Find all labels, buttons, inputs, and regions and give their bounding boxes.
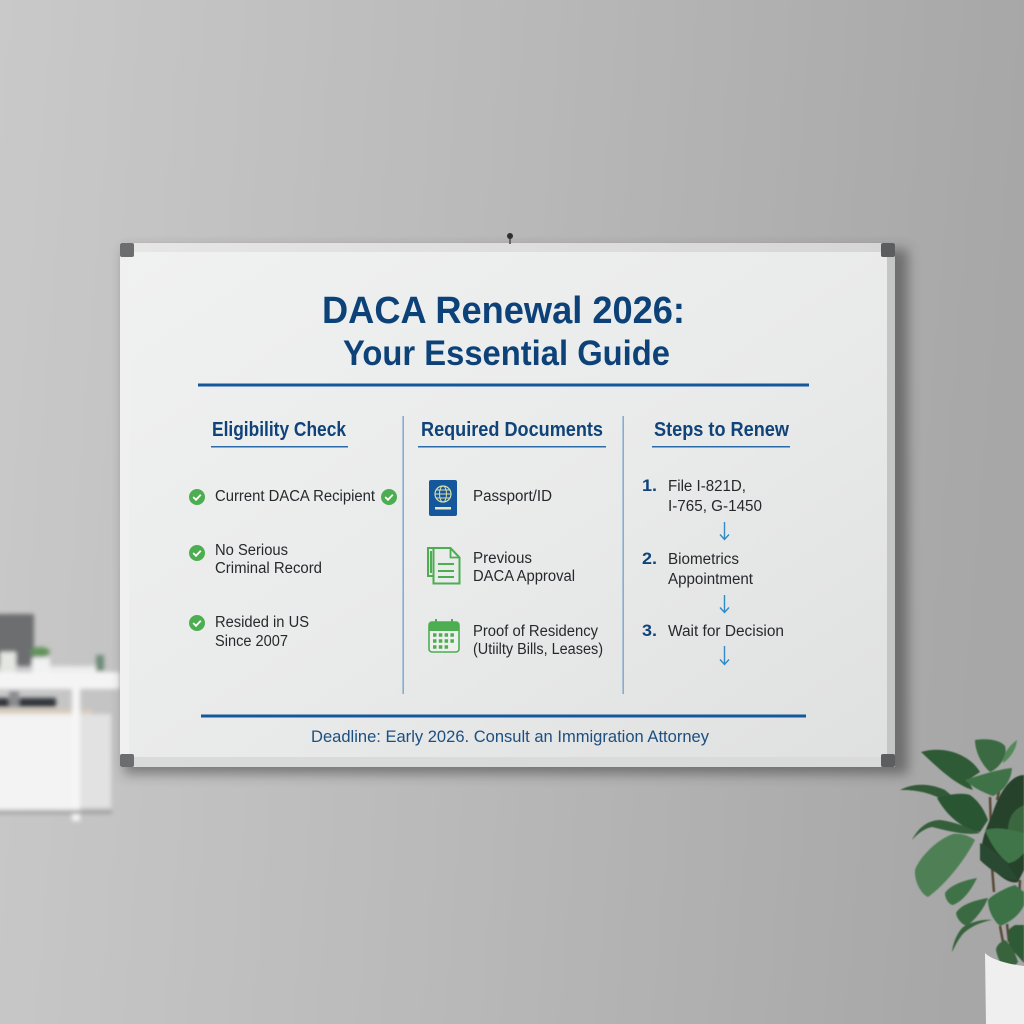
step 2: Biometrics xyxy=(668,551,739,568)
panel: steps to renew xyxy=(642,419,790,664)
item: no serious criminal record xyxy=(189,542,322,577)
step 3: Wait for Decision xyxy=(668,623,784,640)
item: no serious criminal record: Criminal Record xyxy=(215,560,322,577)
title xyxy=(322,290,685,373)
item: proof of residency: Proof of Residency xyxy=(473,623,598,640)
heading: steps to renew: Steps to Renew xyxy=(654,419,789,441)
mounting pin xyxy=(507,233,513,244)
whiteboard xyxy=(120,243,908,774)
item: previous DACA approval: DACA Approval xyxy=(473,568,575,585)
potted plant xyxy=(900,739,1024,1024)
step 1: 1. xyxy=(642,477,657,495)
title: DACA Renewal 2026: xyxy=(322,290,685,332)
arrow xyxy=(720,646,729,664)
footer rule xyxy=(201,714,806,718)
step 1: File I-821D, xyxy=(668,478,746,495)
step 1: I-765, G-1450 xyxy=(668,498,762,515)
item: passport: Passport/ID xyxy=(473,488,552,505)
item: current DACA recipient: Current DACA Recipient xyxy=(215,488,376,505)
deadline note: Deadline: Early 2026. Consult an Immigration Attorney xyxy=(311,727,709,746)
step 2: 2. xyxy=(642,550,657,568)
heading: eligibility check xyxy=(211,419,348,448)
blurred office desk xyxy=(0,614,120,821)
item: no serious criminal record: No Serious xyxy=(215,542,288,559)
step 3: 3. xyxy=(642,622,657,640)
item: proof of residency: (Utiilty Bills, Leases) xyxy=(473,641,603,658)
item: previous DACA approval xyxy=(428,548,575,585)
title: Your Essential Guide xyxy=(343,334,670,373)
heading: required documents: Required Documents xyxy=(421,419,603,441)
panel: required documents xyxy=(418,419,606,658)
step 2: Appointment xyxy=(668,571,754,588)
step 2 xyxy=(642,550,754,588)
column divider xyxy=(402,416,404,694)
item: previous DACA approval: Previous xyxy=(473,550,532,567)
item: proof of residency xyxy=(429,619,603,658)
arrow xyxy=(720,595,729,612)
item: passport xyxy=(429,480,552,516)
title rule xyxy=(198,384,809,386)
arrow xyxy=(720,522,729,540)
column divider xyxy=(622,416,624,694)
heading: eligibility check: Eligibility Check xyxy=(212,419,347,441)
panel: eligibility check xyxy=(189,419,397,650)
step 1 xyxy=(642,477,762,515)
item: resided in US since 2007: Resided in US xyxy=(215,614,309,631)
item: resided in US since 2007 xyxy=(189,614,309,650)
item: resided in US since 2007: Since 2007 xyxy=(215,633,288,650)
